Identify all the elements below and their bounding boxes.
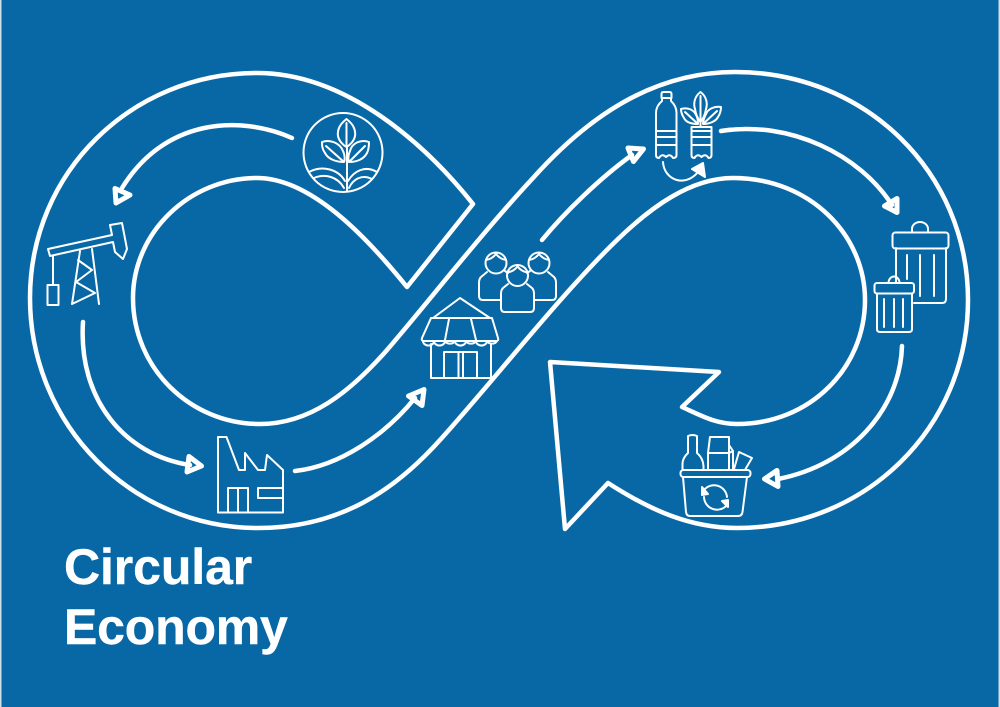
glass bottle <box>682 435 704 470</box>
carton <box>708 437 733 469</box>
icon: recycling basket <box>680 435 752 516</box>
cut bottle with plant <box>681 92 721 158</box>
icon: waste bins <box>874 222 948 332</box>
icon: group of consumers <box>479 252 556 312</box>
plastic bottle <box>656 92 676 158</box>
icon: factory <box>218 437 283 512</box>
title <box>64 539 288 655</box>
arrow: consumers to reuse <box>542 148 644 240</box>
icon: bottle and planted bottle <box>656 92 721 181</box>
person: left <box>479 252 508 300</box>
recycle symbol <box>702 485 728 510</box>
arrow: oil pump to factory <box>83 322 202 472</box>
arrow: plant to oil pump <box>115 125 292 203</box>
box <box>734 452 752 469</box>
infinity loop outline with arrow <box>30 72 968 529</box>
arrow: factory to shop <box>295 390 424 471</box>
icon: shop <box>422 298 498 378</box>
small bin <box>874 276 914 332</box>
small reuse arrow <box>663 162 705 181</box>
icon: plant in circle <box>304 113 382 192</box>
title: Circular <box>64 539 252 595</box>
icon: oil pump <box>48 223 127 305</box>
large bin <box>892 222 948 303</box>
title: Economy <box>64 599 288 655</box>
person: right <box>527 252 556 300</box>
arrow: reuse to waste bins <box>721 129 897 212</box>
person: centre <box>501 265 534 312</box>
arrow: waste bins to recycling basket <box>764 346 902 486</box>
